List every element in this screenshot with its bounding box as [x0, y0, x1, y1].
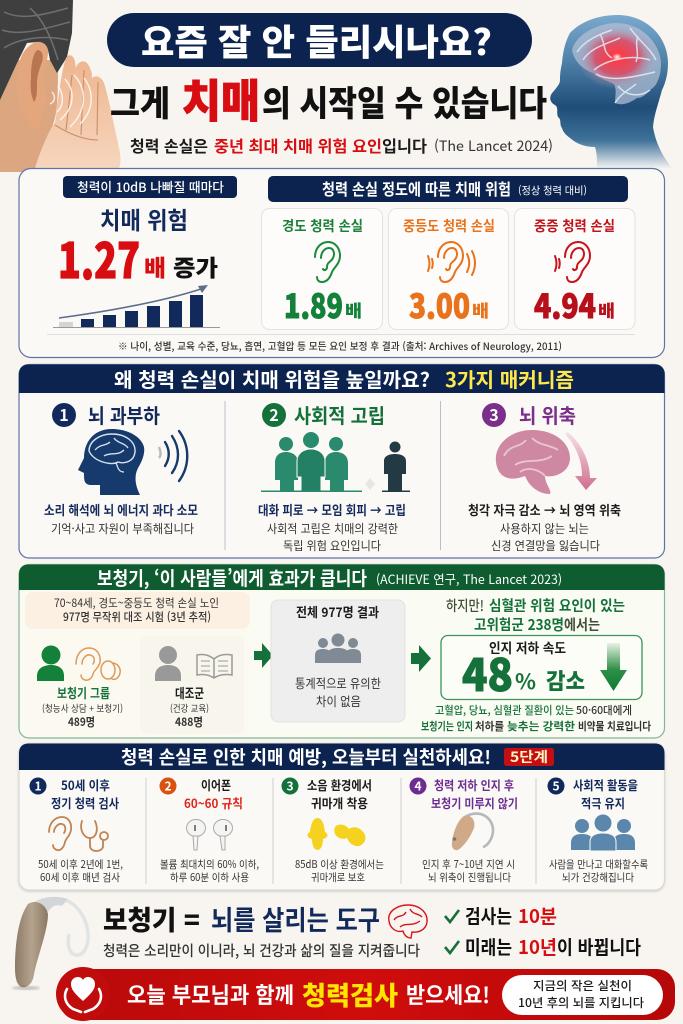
step 4: 인지 후 7~10년 지연 시	[422, 857, 515, 872]
callout pill	[502, 975, 663, 1015]
overall result box	[271, 600, 405, 722]
result box: 48 percent: 감소	[546, 664, 585, 696]
group: hearing aid: 489명	[68, 714, 95, 730]
panel header	[19, 564, 664, 591]
step 2	[160, 775, 259, 885]
panel header	[19, 364, 664, 393]
arrow 1	[254, 643, 273, 668]
high risk group heading: 고위험군 238명	[474, 614, 564, 635]
panel header	[19, 744, 664, 770]
mechanism 3: 뇌 위축	[519, 400, 576, 429]
conclusion: 처하를	[475, 718, 504, 734]
card: mild	[262, 208, 382, 330]
headline	[110, 65, 547, 130]
mechanism 1: 기억·사고 자원이 부족해집니다	[51, 520, 194, 537]
number badge 3: 3	[489, 402, 499, 426]
icon: head with brain and sound waves	[78, 429, 187, 495]
mechanism 1: 소리 해석에 뇌 에너지 과다 소모	[44, 500, 198, 519]
slogan	[103, 899, 427, 961]
headline: 치매	[182, 65, 260, 130]
mechanism 3: 사용하지 않는 뇌는	[500, 520, 589, 537]
footnote: ※ 나이, 성별, 교육 수준, 당뇨, 흡연, 고혈압 등 모든 요인 보정 후 결과 (출처: Archives of Neurology, 2011)	[118, 338, 562, 353]
stat: 1.27 times: 증가	[173, 249, 218, 283]
icon: three people	[571, 814, 635, 851]
slogan: 보청기 =	[103, 899, 200, 938]
step 5: 사회적 활동을	[573, 775, 638, 794]
subtitle: 입니다	[382, 133, 427, 157]
study design box	[25, 592, 250, 629]
conclusion: 보청기는 인지	[421, 718, 473, 734]
mechanism 3	[468, 400, 621, 554]
high risk group heading: 에서는	[564, 614, 600, 635]
card: moderate: 3.00	[409, 280, 470, 328]
stat: 1.27 times: 1.27	[58, 222, 140, 292]
icon: hearing aid	[452, 814, 493, 850]
study design box: 977명 무작위 대조 시험 (3년 추적)	[63, 609, 211, 625]
conclusion: 비약물 치료입니다	[578, 718, 651, 734]
icon: ear and hearing aid	[76, 648, 120, 680]
mechanism 2: 독립 위험 요인입니다	[283, 537, 381, 554]
panel header: 3가지 매커니즘	[445, 364, 574, 393]
icon: ear and stethoscope	[49, 817, 108, 851]
step 4: 청력 저하 인지 후	[434, 775, 514, 794]
icon: earbuds	[186, 820, 232, 850]
high risk group heading: 하지만!	[446, 595, 484, 616]
panel: ACHIEVE study	[19, 564, 664, 738]
step 1: 정기 청력 검사	[51, 793, 119, 812]
photo: man cupping his ear	[0, 0, 120, 172]
number badge 1: 1	[59, 402, 69, 426]
mechanism 1	[44, 400, 198, 537]
slogan: 뇌를 살리는 도구	[211, 899, 380, 938]
card: moderate: 중등도 청력 손실	[403, 216, 495, 236]
number badge: 2	[164, 778, 172, 794]
step 3: 귀마개로 보호	[311, 870, 365, 885]
result box: 48 percent: %	[515, 666, 536, 696]
card: mild: 1.89	[284, 280, 343, 328]
conclusion: 고혈압, 당뇨, 심혈관 질환이 있는	[435, 702, 574, 718]
heading: risk by severity: (정상 청력 대비)	[518, 183, 587, 198]
step 2: 60~60 규칙	[184, 793, 243, 812]
card: severe: 배	[598, 297, 615, 322]
number badge 2: 2	[269, 402, 279, 426]
step 3: 85dB 이상 환경에서는	[295, 857, 384, 872]
group: hearing aid: (청능사 상담 + 보청기)	[42, 701, 123, 715]
subtitle: (The Lancet 2024)	[434, 136, 553, 156]
chart: rising bars	[53, 285, 220, 328]
step 1: 50세 이후	[61, 775, 110, 794]
item: 10 minutes: 검사는	[465, 902, 512, 929]
item: 10 years: 이 바뀝니다	[557, 933, 641, 960]
conclusion	[421, 702, 651, 734]
heading: every 10dB: 청력이 10dB 나빠질 때마다	[77, 177, 224, 196]
step 5	[548, 775, 648, 885]
mechanism 1: 뇌 과부하	[88, 400, 160, 429]
subtitle	[130, 133, 553, 157]
heading: risk by severity: 청력 손실 정도에 따른 치매 위험	[322, 176, 511, 200]
panel: three mechanisms	[19, 364, 664, 558]
callout pill: 10년 후의 뇌를 지킵니다	[518, 994, 644, 1011]
checklist	[445, 902, 641, 960]
panel header: 보청기, ‘이 사람들’에게 효과가 큽니다	[97, 564, 367, 591]
number badge 1	[52, 402, 76, 427]
number badge 3	[482, 402, 506, 427]
high risk group heading	[446, 595, 625, 635]
conclusion: 늦추는 강력한	[507, 718, 575, 734]
panel: dementia risk by hearing loss	[19, 168, 664, 358]
callout pill: 지금의 작은 실천이	[533, 977, 632, 994]
study groups	[25, 630, 250, 736]
card: moderate: 배	[472, 297, 489, 322]
mechanism 2: 사회적 고립은 치매의 강력한	[267, 520, 398, 537]
group: control: 488명	[175, 714, 203, 730]
step 3	[282, 775, 384, 885]
icon: gray person	[155, 646, 181, 681]
step 2: 하루 60분 이하 사용	[170, 870, 249, 885]
card: mild: 배	[345, 297, 362, 322]
item: 10 minutes: 10분	[518, 902, 557, 929]
step 4: 뇌 위축이 진행됩니다	[428, 870, 511, 885]
headline: 그게	[110, 76, 170, 127]
stat: 1.27 times	[58, 201, 218, 292]
card: severe: 중증 청력 손실	[534, 216, 615, 236]
step 1	[30, 775, 123, 885]
icon: group and isolated person	[261, 432, 410, 492]
number badge: 4	[414, 778, 422, 794]
item: 10 minutes	[445, 902, 557, 929]
conclusion: 50·60대에게	[576, 702, 632, 718]
card: moderate	[388, 208, 508, 330]
icon: three people	[315, 634, 361, 663]
subtitle: 청력 손실은	[130, 133, 208, 157]
step 1: 60세 이후 매년 검사	[40, 870, 120, 885]
step 5: 뇌가 건강해집니다	[562, 870, 634, 885]
icon: orange ear with waves	[428, 242, 475, 282]
call to action banner: 청력검사	[302, 976, 398, 1013]
group: hearing aid	[37, 646, 123, 730]
result box: 48 percent	[441, 636, 642, 704]
item: 10 years: 10년	[518, 933, 557, 960]
step 2: 이어폰	[201, 775, 231, 794]
mechanism 3: 신경 연결망을 잃습니다	[491, 537, 600, 554]
subtitle: 중년 최대 치매 위험 요인	[214, 133, 382, 157]
arrow 2	[411, 645, 431, 672]
headline: 의 시작일 수 있습니다	[262, 76, 547, 127]
mechanism 2: 사회적 고립	[294, 400, 385, 429]
mechanism 2: 대화 피로 → 모임 회피 → 고립	[258, 500, 406, 519]
group: control	[155, 646, 232, 730]
result box: 48 percent: 인지 저하 속도	[489, 637, 566, 657]
icon: open book	[197, 654, 232, 678]
group: control: 대조군	[175, 683, 204, 702]
step 4: 보청기 미루지 않기	[431, 793, 518, 812]
image: large hearing aid	[12, 897, 88, 990]
overall result box: 차이 없음	[316, 691, 361, 710]
step 1: 50세 이후 2년에 1번,	[38, 857, 123, 872]
item: 10 years: 미래는	[465, 933, 512, 960]
overall result box: 통계적으로 유의한	[295, 673, 381, 692]
panel header: (ACHIEVE 연구, The Lancet 2023)	[376, 569, 562, 588]
card: severe: 4.94	[534, 280, 596, 328]
number badge: 5	[552, 778, 560, 794]
heading: risk by severity	[268, 176, 628, 202]
item: 10 years	[445, 933, 641, 960]
icon: down arrow	[600, 643, 627, 691]
step 4	[410, 775, 518, 885]
number badge: 1	[34, 778, 42, 794]
icon: shrinking brain with arrow	[496, 430, 597, 494]
title pill: 요즘 잘 안 들리시나요?	[141, 14, 492, 66]
panel header: 5단계	[510, 747, 548, 767]
high risk group heading: 심혈관 위험 요인이 있는	[489, 595, 625, 616]
icon: red brain	[389, 905, 427, 938]
icon: red ear with waves	[555, 242, 590, 282]
overall result box: 전체 977명 결과	[296, 602, 379, 621]
photo: blue head with glowing brain	[550, 15, 672, 168]
step 5: 적극 유지	[581, 793, 625, 812]
icon: green person	[37, 646, 64, 681]
icon: yellow ear plugs	[308, 818, 365, 850]
step 3: 귀마개 착용	[311, 793, 368, 812]
group: hearing aid: 보청기 그룹	[57, 683, 110, 702]
card: severe	[514, 208, 635, 330]
slogan: 청력은 소리만이 이니라, 뇌 건강과 삶의 질을 지켜줍니다	[103, 940, 420, 961]
step 5: 사람을 만나고 대화할수록	[549, 857, 648, 872]
mechanism 3: 청각 자극 감소 → 뇌 영역 위축	[468, 500, 621, 519]
call to action banner: 오늘 부모님과 함께	[127, 978, 294, 1010]
call to action banner	[56, 967, 675, 1021]
study design box: 70~84세, 경도~중등도 청력 손실 노인	[54, 595, 219, 611]
step 3: 소음 환경에서	[307, 775, 372, 794]
number badge 2	[262, 402, 286, 427]
icon: heart in hands	[65, 977, 101, 1012]
card: mild: 경도 청력 손실	[282, 216, 363, 236]
icon: green ear	[315, 242, 340, 282]
step 2: 볼륨 최대치의 60% 이하,	[160, 857, 259, 872]
panel header: 청력 손실로 인한 치매 예방, 오늘부터 실천하세요!	[121, 744, 491, 770]
call to action banner: 받으세요!	[406, 978, 490, 1010]
result box: 48 percent: 48	[462, 640, 513, 704]
panel header: 왜 청력 손실이 치매 위험을 높일까요?	[114, 364, 430, 393]
stat: 1.27 times: 배	[144, 249, 166, 283]
stat: 1.27 times: 치매 위험	[100, 201, 188, 236]
mechanism 2	[258, 400, 410, 554]
panel: five steps	[19, 744, 664, 890]
number badge: 3	[286, 778, 294, 794]
group: control: (건강 교육)	[170, 701, 209, 715]
